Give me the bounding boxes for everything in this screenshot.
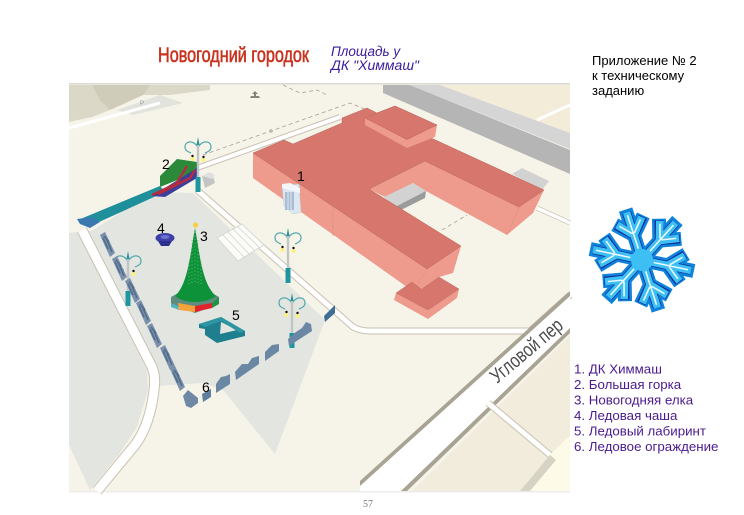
building 1: DK Khimmash [253, 106, 549, 319]
page number: 57 [363, 499, 373, 510]
number labels [157, 156, 305, 395]
left lawn [69, 232, 148, 490]
parking area [117, 95, 183, 115]
annex note: Приложение № 2 [592, 53, 697, 68]
street name: Угловой пер [486, 314, 568, 388]
annex note [592, 53, 697, 98]
neighbouring buildings top left [69, 85, 210, 122]
roof [253, 106, 544, 269]
subtitle: location [329, 44, 420, 73]
steps [217, 224, 264, 261]
number labels: 4 [157, 220, 165, 236]
legend: 6. Ледовое ограждение [574, 439, 718, 454]
walls [253, 153, 461, 289]
annex grey roofs [384, 168, 549, 212]
legend: 1. ДК Химмаш [574, 362, 662, 376]
subtitle: location: ДК "Химмаш" [329, 58, 420, 73]
icon: map marker [250, 91, 260, 98]
subtitle: location: Площадь у [331, 44, 401, 59]
legend: 3. Новогодняя елка [574, 392, 694, 408]
upper wing [365, 118, 437, 148]
legend: 5. Ледовый лабиринт [574, 424, 706, 438]
dashed footpaths [203, 85, 467, 230]
title: Новогодний городок [158, 44, 310, 67]
new year tree [171, 222, 219, 313]
legend [574, 362, 718, 454]
south wing [394, 289, 459, 319]
number labels: 3 [200, 228, 208, 244]
number labels: 5 [232, 307, 240, 323]
roads [82, 117, 570, 491]
big slide [77, 159, 197, 228]
upper left road [69, 103, 160, 128]
number labels: 1 [297, 168, 305, 184]
ice fence [100, 232, 335, 408]
long grey building [383, 85, 570, 174]
parking letter: P [140, 101, 144, 107]
plaza ground [85, 192, 325, 454]
ice bowl [156, 233, 174, 246]
legend: 2. Большая горка [574, 377, 682, 392]
map [69, 83, 570, 492]
number labels: 6 [202, 379, 210, 395]
legend: 4. Ледовая чаша [574, 408, 678, 423]
top right beige block [440, 85, 570, 133]
number labels: 2 [162, 156, 170, 172]
ice labyrinth [199, 317, 245, 343]
icon: snowflake [587, 205, 697, 315]
annex note: заданию [592, 83, 644, 98]
Uglovoy lane [360, 291, 570, 491]
lamp posts [115, 137, 305, 348]
annex note: к техническому [592, 68, 685, 83]
kiosk [202, 172, 215, 188]
entrance portico [282, 183, 301, 214]
